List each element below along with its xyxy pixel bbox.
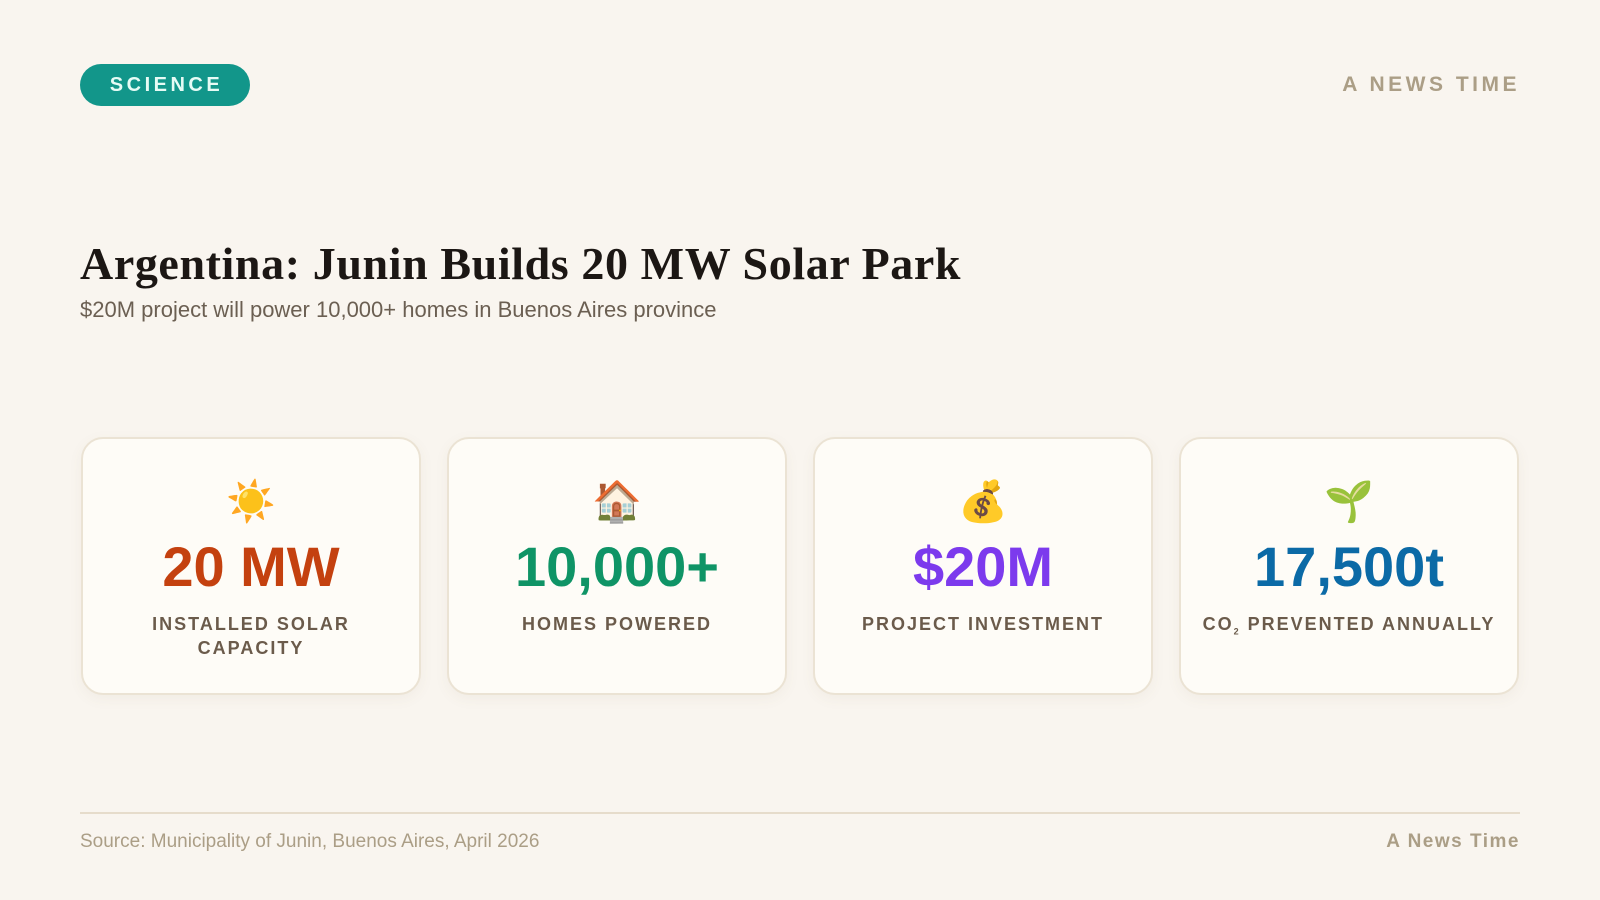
card: capacity — [81, 437, 421, 695]
category pill — [80, 64, 250, 106]
source note: Source: Municipality of Junin, Buenos Aires, April 2026 — [80, 831, 539, 852]
brand header: A NEWS TIME — [1342, 73, 1520, 96]
label: homes: HOMES POWERED — [522, 614, 712, 634]
icon: house: 🏠 — [592, 478, 642, 525]
category pill: SCIENCE — [110, 74, 223, 96]
stat: 20 MW: 20 MW — [162, 535, 340, 598]
card: investment — [813, 437, 1153, 695]
label: co2: CO2 PREVENTED ANNUALLY — [1203, 614, 1495, 637]
icon: sun: ☀️ — [226, 478, 276, 525]
icon: seedling: 🌱 — [1324, 478, 1374, 525]
footer brand: A News Time — [1386, 831, 1520, 852]
icon: money bag: 💰 — [958, 478, 1008, 525]
card: homes — [447, 437, 787, 695]
subtitle: $20M project will power 10,000+ homes in Buenos Aires province — [80, 297, 717, 322]
stat: homes: 10,000+ — [515, 535, 719, 598]
title: Argentina: Junin Builds 20 MW Solar Park — [80, 238, 961, 289]
label: capacity: INSTALLED SOLAR CAPACITY — [152, 614, 350, 658]
stat: co2: 17,500t — [1254, 535, 1444, 598]
label: investment: PROJECT INVESTMENT — [862, 614, 1104, 634]
card: co2 — [1179, 437, 1519, 695]
stat: investment: $20M — [913, 535, 1053, 598]
